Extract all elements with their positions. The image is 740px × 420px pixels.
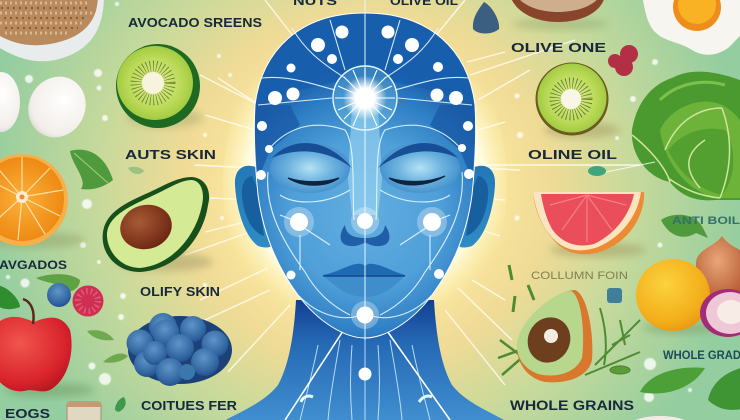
- food: fried egg: [643, 0, 740, 55]
- label: column foin: COLLUMN FOIN: [531, 270, 628, 282]
- radiating rays: [185, 0, 640, 385]
- jar: [67, 402, 101, 420]
- left eyelid: [270, 143, 350, 193]
- left lash: [288, 178, 339, 185]
- label: avocado greens: AVOCADO SREENS: [128, 15, 262, 30]
- nodes: [256, 26, 474, 380]
- label: oline oil: OLINE OIL: [528, 147, 617, 162]
- glowing nodes: [284, 207, 447, 329]
- forehead shading: [257, 15, 473, 105]
- circuit lines on face: [258, 0, 472, 340]
- small herbs near avocado: [498, 265, 640, 375]
- sides shading: [255, 105, 300, 180]
- label: whole grains: WHOLE GRAINS: [510, 398, 634, 413]
- neck crescents: [301, 396, 432, 402]
- food: grain bowl top left: [0, 0, 104, 61]
- food: blueberry cluster: [126, 313, 232, 386]
- nose: [341, 225, 389, 246]
- icon: mint leaf: [70, 150, 144, 189]
- label: olive one: OLIVE ONE: [511, 40, 606, 55]
- plate bottom right: [632, 416, 688, 420]
- right ear: [459, 166, 495, 248]
- label: nuts skin: AUTS SKIN: [125, 148, 216, 162]
- food: avocado half: [103, 177, 213, 272]
- food: lemon: [636, 259, 718, 334]
- brain burst: [333, 66, 397, 130]
- right lash: [389, 176, 445, 185]
- icon: teal square: [607, 288, 622, 303]
- neck and shoulders: [222, 300, 508, 420]
- food: grapefruit wedge: [533, 192, 646, 257]
- icon: leaf: [661, 215, 708, 238]
- food: eggs: [0, 66, 96, 148]
- food: kiwi right: [536, 62, 620, 138]
- neck lines: [300, 320, 430, 420]
- icon: leaves bottom right: [640, 367, 740, 410]
- food: brown bowl top: [510, 0, 608, 30]
- label: avgados: AVGADOS: [0, 258, 67, 272]
- food: lettuce: [632, 72, 740, 200]
- top labels: [293, 0, 458, 8]
- left ear: [235, 166, 271, 248]
- food: green avocado half: [517, 290, 592, 382]
- food: onion: [696, 236, 740, 298]
- food: apple: [0, 285, 95, 397]
- small herbs left: [87, 330, 128, 412]
- food: orange slice: [0, 154, 85, 248]
- right brow: [378, 143, 458, 168]
- icon: dark blue stone: [473, 2, 499, 34]
- left brow: [272, 143, 352, 168]
- food: kiwi left: [116, 44, 203, 128]
- small teal accent: [588, 162, 655, 176]
- face: [254, 13, 476, 338]
- light halo around head: [223, 0, 507, 375]
- figure: blue head and neck: [222, 0, 508, 420]
- food: red onion slice: [700, 289, 740, 337]
- food: berries: [36, 274, 104, 316]
- label: coitues fer: COITUES FER: [141, 399, 237, 413]
- label: olify skin: OLIFY SKIN: [140, 285, 220, 299]
- food: raspberry: [608, 45, 638, 76]
- lips: [323, 264, 405, 297]
- right eyelid: [380, 143, 460, 193]
- label: anti boil: ANTI BOIL: [672, 215, 740, 227]
- central glow column: [348, 105, 382, 215]
